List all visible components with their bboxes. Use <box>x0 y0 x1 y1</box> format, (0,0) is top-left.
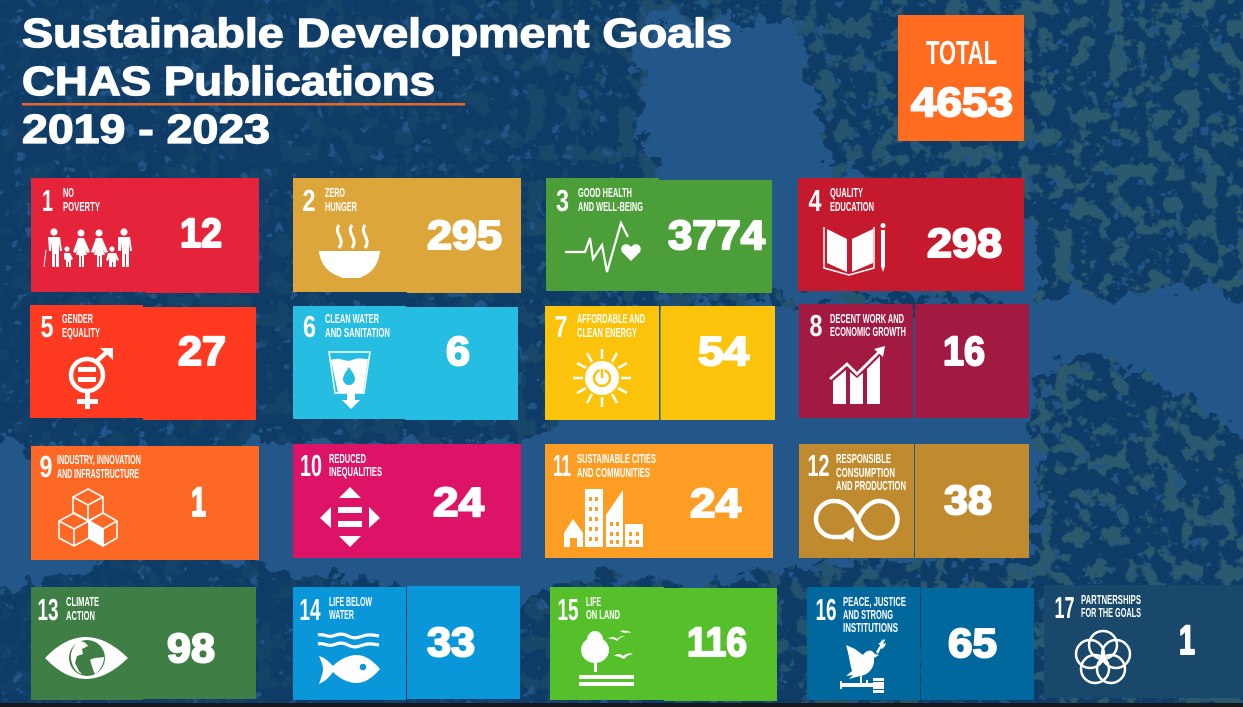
panel: goal 4 quality education <box>798 178 1024 291</box>
icon: heartbeat <box>565 223 641 272</box>
panel: goal 11 sustainable cities: 11 <box>553 448 571 483</box>
title <box>22 10 732 152</box>
panel: goal 12 responsible consumption: 12 <box>808 448 830 483</box>
panel: goal 5 gender equality: GENDER <box>62 312 93 326</box>
icon: waves and fish <box>318 634 380 684</box>
icon: tree and birds <box>579 630 634 686</box>
panel: goal 6 clean water <box>293 306 518 420</box>
value: 33 <box>427 619 475 665</box>
value: 24 <box>690 480 741 526</box>
panel: goal 17 partnerships: PARTNERSHIPS <box>1081 593 1141 607</box>
panel: goal 11 sustainable cities: AND COMMUNITIES <box>577 466 650 480</box>
title: CHAS Publications <box>22 58 435 104</box>
icon: infinity loop <box>816 501 898 542</box>
panel: goal 13 climate action: ACTION <box>66 609 95 623</box>
icon: growth chart <box>830 346 885 404</box>
total box: 4653 <box>911 79 1013 125</box>
panel: goal 1 no poverty: 1 <box>42 183 53 218</box>
panel: goal 12 responsible consumption: CONSUMPTION <box>836 466 895 480</box>
value: 298 <box>927 220 1002 266</box>
value: 27 <box>178 328 226 374</box>
panel: goal 14 life below water: 14 <box>300 592 321 627</box>
value: 65 <box>948 620 997 666</box>
panel: goal 10 reduced inequalities: 10 <box>300 448 322 483</box>
panel: goal 10 reduced inequalities: INEQUALITIES <box>329 465 382 479</box>
panel: goal 15 life on land: ON LAND <box>586 608 620 622</box>
icon: family <box>44 228 132 267</box>
panel: goal 3 good health: AND WELL-BEING <box>578 200 643 214</box>
panel: goal 2 zero hunger <box>293 178 521 293</box>
panel: goal 2 zero hunger: ZERO <box>325 186 345 200</box>
panel: goal 16 peace justice: AND STRONG <box>843 608 893 622</box>
value: 24 <box>433 479 484 525</box>
panel: goal 16 peace justice: INSTITUTIONS <box>843 621 898 635</box>
title: 2019 - 2023 <box>22 106 270 152</box>
icon: five rings <box>1076 631 1130 683</box>
panel: goal 7 clean energy: CLEAN ENERGY <box>577 326 637 340</box>
panel: goal 9 industry <box>31 446 259 560</box>
panel: goal 16 peace justice: PEACE, JUSTICE <box>843 595 906 609</box>
panel: goal 6 clean water: AND SANITATION <box>325 326 390 340</box>
value: 3774 <box>668 212 765 258</box>
icon: cubes <box>59 489 117 546</box>
panel: goal 2 zero hunger: HUNGER <box>325 200 357 214</box>
total box <box>898 15 1024 141</box>
value: 6 <box>446 328 470 374</box>
panel: goal 13 climate action <box>31 587 256 700</box>
icon: book and pencil <box>824 223 886 275</box>
value: 98 <box>167 625 215 671</box>
panel: goal 15 life on land: LIFE <box>586 595 601 609</box>
panel: goal 10 reduced inequalities <box>293 444 521 558</box>
panel: goal 17 partnerships: 17 <box>1054 590 1074 625</box>
panel: goal 7 clean energy: 7 <box>554 309 568 344</box>
value: 12 <box>180 210 222 256</box>
value: 54 <box>698 328 749 374</box>
panel: goal 15 life on land <box>550 587 777 701</box>
panel: goal 9 industry: INDUSTRY, INNOVATION <box>57 453 141 467</box>
title: Sustainable Development Goals <box>22 10 732 56</box>
value: 295 <box>427 212 502 258</box>
panel: goal 5 gender equality <box>30 305 256 420</box>
icon: eye with globe <box>45 637 128 679</box>
panel: goal 7 clean energy: AFFORDABLE AND <box>577 312 645 326</box>
panel: goal 12 responsible consumption: AND PRODUCTION <box>836 479 906 493</box>
panel: goal 14 life below water: LIFE BELOW <box>329 595 372 609</box>
icon: gender symbol <box>71 348 113 409</box>
total box: TOTAL <box>926 34 997 71</box>
panel: goal 5 gender equality: EQUALITY <box>62 326 100 340</box>
panel: goal 14 life below water <box>293 586 520 700</box>
panel: goal 4 quality education: 4 <box>808 183 822 218</box>
panel: goal 12 responsible consumption <box>799 444 1029 558</box>
panel: goal 1 no poverty: POVERTY <box>63 200 100 214</box>
panel: goal 10 reduced inequalities: REDUCED <box>329 452 366 466</box>
panel: goal 16 peace justice <box>807 587 1034 700</box>
panel: goal 15 life on land: 15 <box>558 592 578 627</box>
panel: goal 13 climate action: 13 <box>38 592 58 627</box>
panel: goal 3 good health: 3 <box>556 183 569 218</box>
panel: goal 6 clean water: CLEAN WATER <box>325 312 379 326</box>
panel: goal 11 sustainable cities <box>545 444 773 558</box>
icon: sun power <box>573 349 631 407</box>
panel: goal 8 decent work: ECONOMIC GROWTH <box>830 325 906 339</box>
value: 38 <box>944 477 992 523</box>
panel: goal 13 climate action: CLIMATE <box>66 595 99 609</box>
panel: goal 17 partnerships <box>1044 585 1243 698</box>
icon: water glass <box>329 352 370 409</box>
panel: goal 1 no poverty: NO <box>63 186 74 200</box>
value: 16 <box>943 328 985 374</box>
panel: goal 8 decent work: DECENT WORK AND <box>830 312 904 326</box>
panel: goal 4 quality education: QUALITY <box>830 186 863 200</box>
panel: goal 3 good health <box>546 178 772 293</box>
panel: goal 4 quality education: EDUCATION <box>830 200 874 214</box>
value: 1 <box>1179 617 1195 663</box>
panel: goal 7 clean energy <box>545 306 775 420</box>
panel: goal 3 good health: GOOD HEALTH <box>578 186 632 200</box>
value: 1 <box>191 479 206 525</box>
panel: goal 2 zero hunger: 2 <box>302 183 316 218</box>
panel: goal 11 sustainable cities: SUSTAINABLE CITIES <box>577 452 656 466</box>
panel: goal 9 industry: AND INFRASTRUCTURE <box>57 467 139 481</box>
panel: goal 16 peace justice: 16 <box>816 592 836 627</box>
panel: goal 12 responsible consumption: RESPONSIBLE <box>836 452 891 466</box>
panel: goal 1 no poverty <box>31 178 259 293</box>
panel: goal 9 industry: 9 <box>40 449 52 484</box>
panel: goal 6 clean water: 6 <box>303 309 316 344</box>
icon: arrows and equals <box>320 487 380 547</box>
panel: goal 17 partnerships: FOR THE GOALS <box>1081 606 1141 620</box>
icon: bowl <box>319 225 380 278</box>
icon: city <box>564 489 643 547</box>
value: 116 <box>687 619 747 665</box>
panel: goal 5 gender equality: 5 <box>40 309 54 344</box>
panel: goal 14 life below water: WATER <box>329 608 354 622</box>
icon: dove and gavel <box>840 639 886 693</box>
panel: goal 8 decent work: 8 <box>810 308 822 343</box>
panel: goal 8 decent work <box>799 304 1029 418</box>
